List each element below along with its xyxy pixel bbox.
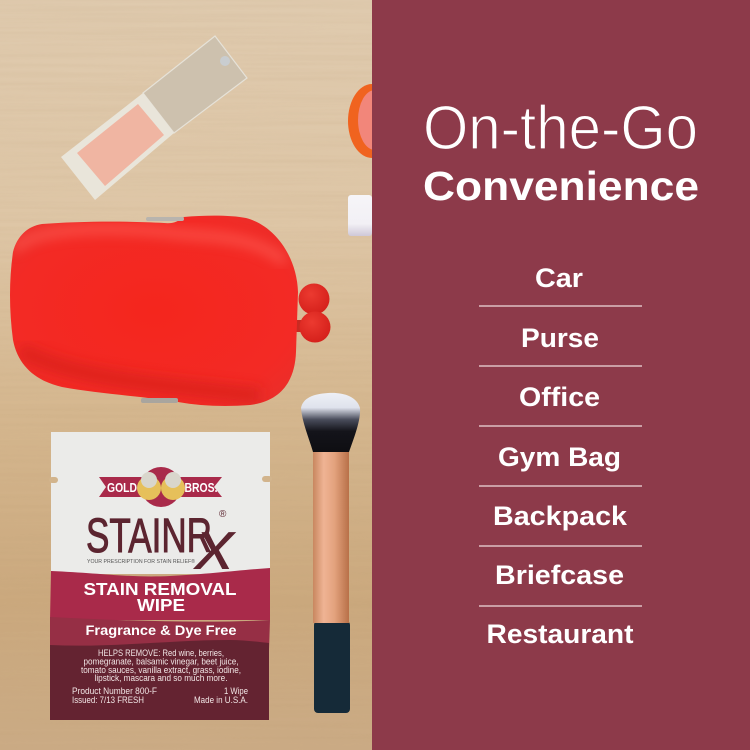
list dividers (479, 306, 642, 606)
StainRx wordmark (86, 506, 237, 584)
packet small print: HELPS REMOVE: Red wine, berries, (98, 648, 224, 659)
packet tear notches (49, 476, 272, 483)
list of locations: Purse (521, 323, 599, 353)
list of locations: Backpack (493, 501, 627, 531)
red coin purse (10, 216, 330, 406)
compact blush pan (77, 104, 164, 186)
packet small print: Issued: 7/13 FRESH (72, 695, 144, 706)
packet heading: STAIN REMOVAL (84, 579, 237, 599)
Gold Bros logo: GOLD (107, 481, 137, 495)
brush bristles (301, 393, 360, 452)
brush handle (314, 621, 350, 713)
brush ferrule (313, 451, 349, 623)
StainRx wordmark: ® (219, 509, 227, 520)
packet heading (84, 579, 237, 638)
compact clear lid (143, 36, 247, 133)
white tube (348, 195, 372, 236)
packet small print: lipstick, mascara and so much more. (94, 673, 228, 684)
title: Convenience (423, 163, 699, 209)
purse shading (14, 229, 285, 396)
packet white top (51, 432, 270, 574)
StainRx wordmark: YOUR PRESCRIPTION FOR STAIN RELIEF® (87, 558, 195, 565)
packet small print: pomegranate, balsamic vinegar, beet juice, (84, 656, 238, 668)
packet heading: Fragrance & Dye Free (86, 623, 237, 638)
packet small print: Product Number 800-F (72, 686, 157, 697)
orange lip balm cap (348, 84, 396, 158)
purse clips (146, 217, 184, 221)
StainRx wordmark: STAINR (86, 510, 212, 563)
packet small print (72, 648, 248, 706)
packet crimson band (50, 568, 270, 620)
packet small print: Made in U.S.A. (194, 695, 248, 706)
makeup compact (61, 36, 247, 200)
list of locations (486, 263, 634, 649)
packet heading: WIPE (137, 595, 185, 615)
StainRx wordmark: x (193, 506, 237, 584)
Gold Bros logo: BROS. (184, 481, 218, 495)
list of locations: Restaurant (486, 619, 634, 649)
panel: on-the-go convenience (372, 0, 750, 750)
list of locations: Car (535, 263, 583, 293)
compact hinge screw (220, 56, 230, 66)
list of locations: Briefcase (495, 560, 624, 590)
packet dark band (50, 640, 269, 720)
title (423, 94, 699, 209)
list of locations: Gym Bag (498, 442, 621, 472)
packet small print: tomato sauces, vanilla extract, grass, iodine, (81, 665, 241, 676)
Gold Bros logo (99, 467, 222, 507)
makeup brush (301, 393, 360, 713)
purse body (10, 216, 298, 406)
packet small print: 1 Wipe (224, 686, 248, 697)
title: On-the-Go (423, 94, 698, 163)
list of locations: Office (519, 382, 600, 412)
photo: wooden tabletop (0, 0, 372, 750)
packet mid band (50, 617, 270, 650)
purse clasp balls (296, 320, 304, 332)
StainRx wipe packet (49, 432, 272, 720)
compact white frame (61, 93, 174, 200)
